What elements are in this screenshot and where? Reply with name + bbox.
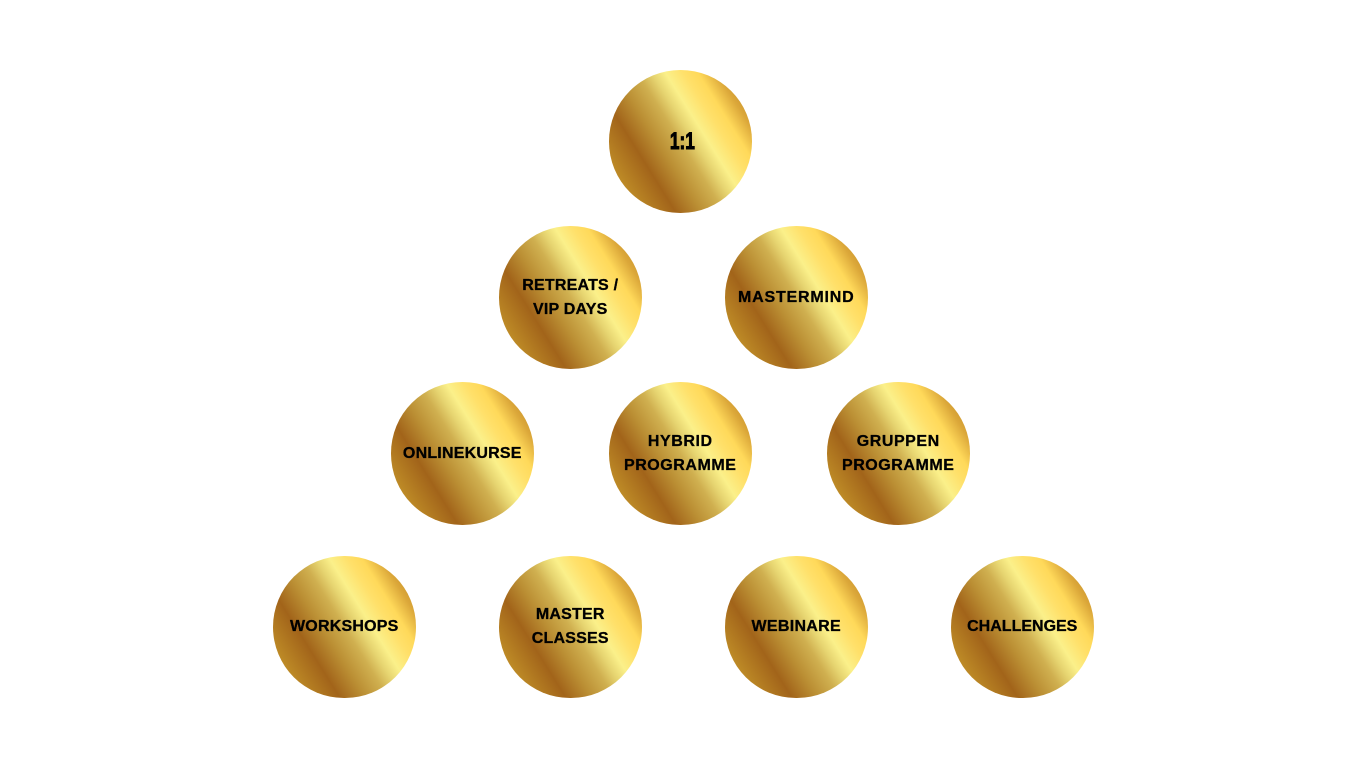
node: Mastermind (725, 226, 868, 368)
node: Mastermind: MASTERMIND (738, 289, 854, 306)
node: Gruppen Programme: GRUPPEN (857, 433, 940, 450)
node: Challenges: CHALLENGES (967, 618, 1077, 635)
node: Master Classes: CLASSES (532, 630, 609, 647)
node: Retreats / VIP Days: VIP DAYS (533, 301, 608, 318)
node: Workshops: WORKSHOPS (290, 618, 398, 635)
node: Workshops (273, 556, 416, 698)
node: Master Classes (499, 556, 642, 698)
node: Hybrid Programme (609, 382, 752, 524)
node: Retreats / VIP Days: RETREATS / (522, 277, 618, 294)
node: Retreats / VIP Days (499, 226, 642, 368)
node: Webinare: WEBINARE (751, 618, 841, 635)
node: Hybrid Programme: HYBRID (648, 433, 713, 450)
node: Gruppen Programme (827, 382, 970, 524)
node: 1:1: 1:1 (670, 128, 695, 155)
node: Hybrid Programme: PROGRAMME (624, 457, 736, 474)
node: Gruppen Programme: PROGRAMME (842, 457, 954, 474)
node: Onlinekurse (391, 382, 534, 524)
node: Webinare (725, 556, 868, 698)
node: Onlinekurse: ONLINEKURSE (403, 445, 522, 462)
node: Challenges (951, 556, 1094, 698)
node: 1:1 (609, 70, 752, 212)
node: Master Classes: MASTER (536, 606, 605, 623)
